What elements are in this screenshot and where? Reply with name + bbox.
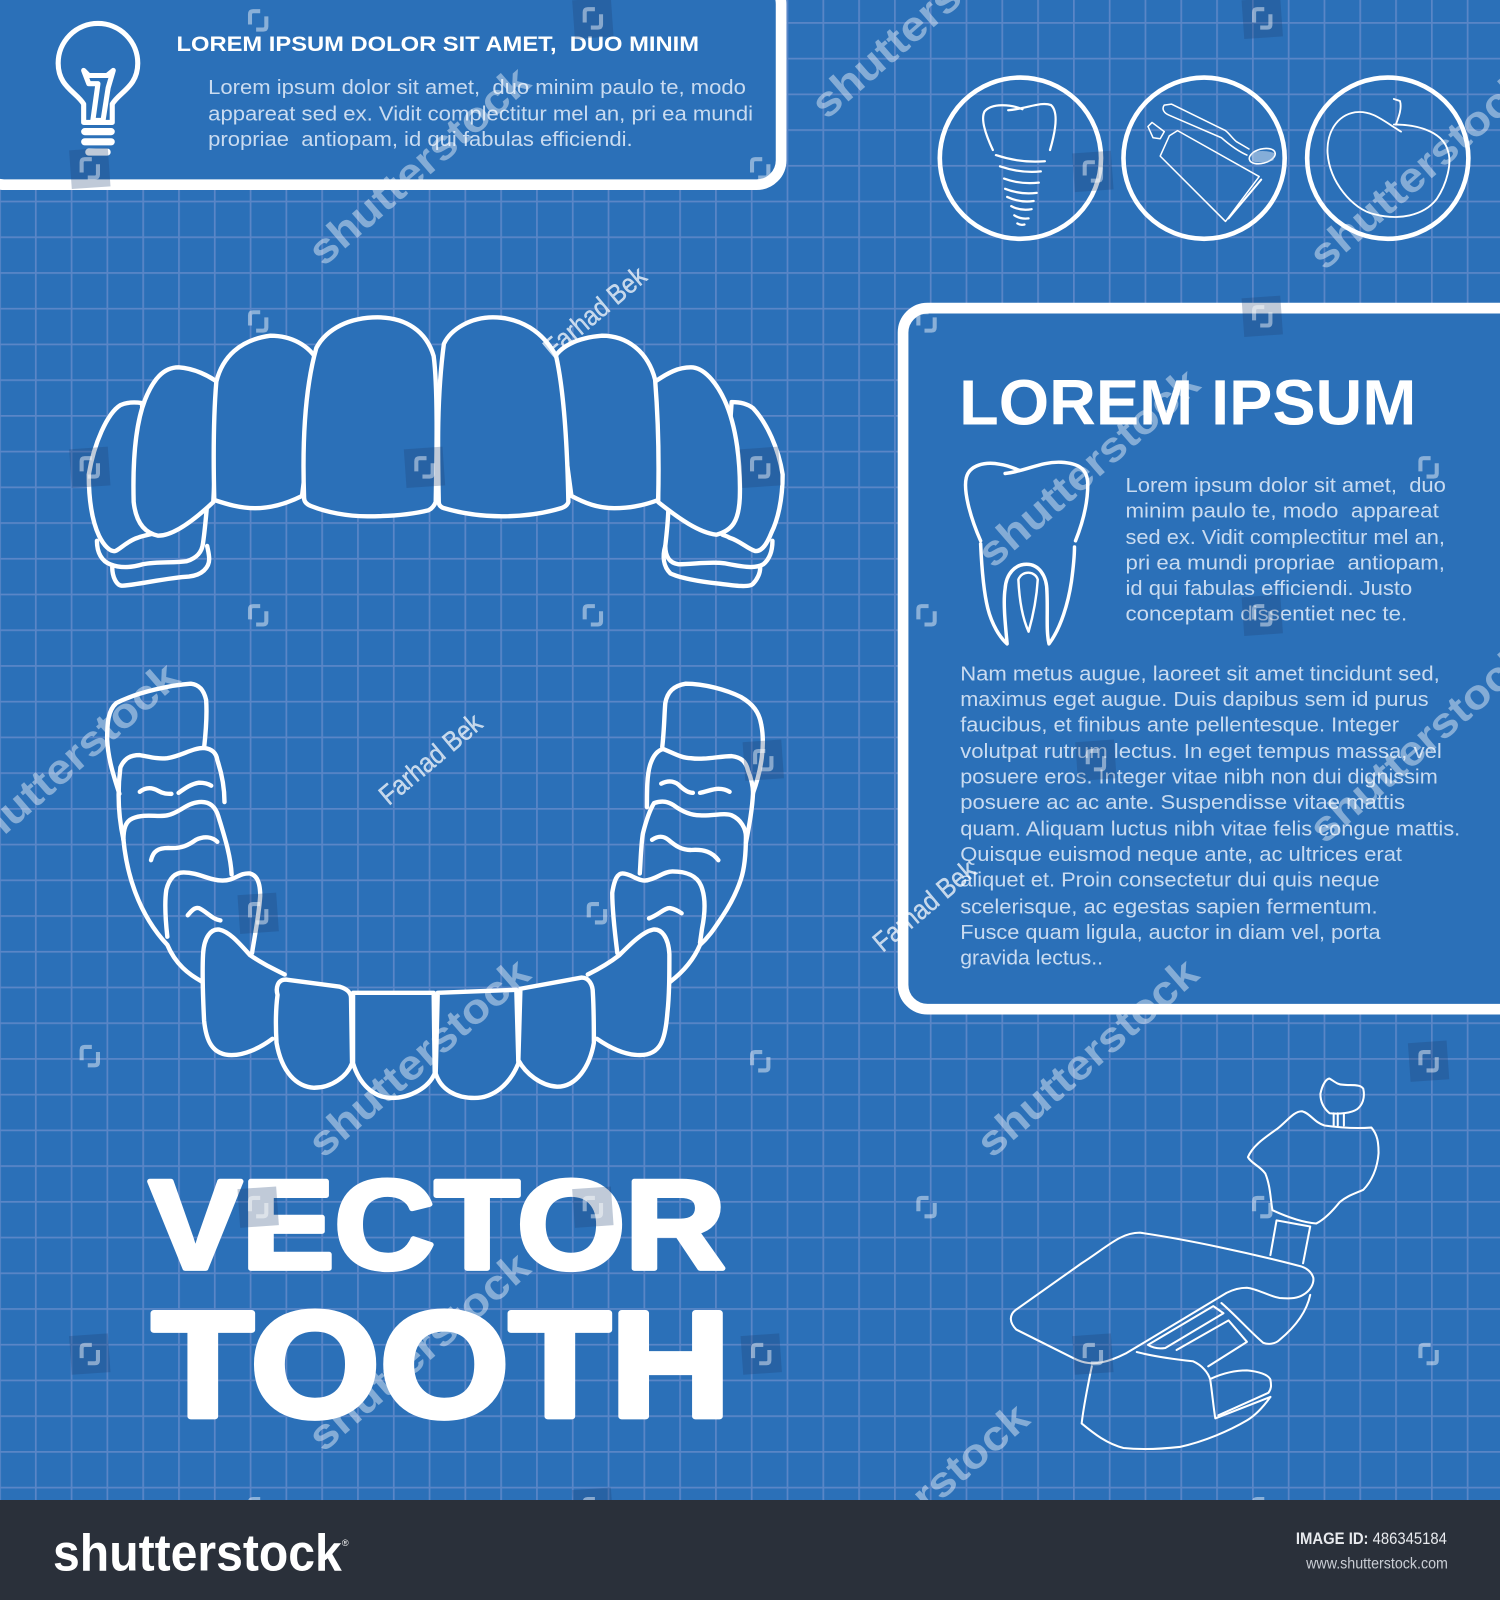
watermarks: shutterstock stock marks: shutterstock [968, 358, 1209, 576]
text block: right panel intro: id qui fabulas efficiendi. Justo [1126, 578, 1412, 600]
text block: right panel body: quam. Aliquam luctus nibh vitae felis congue mattis. [960, 819, 1460, 841]
watermarks: shutterstock stock marks: shutterstock [299, 948, 539, 1166]
title: VECTOR TOOTH [149, 1153, 731, 1448]
text block: top panel body: Lorem ipsum dolor sit amet, duo minim paulo te, modo [208, 77, 746, 99]
heading: top panel: LOREM IPSUM DOLOR SIT AMET, DUO MINIM [177, 32, 699, 56]
text block: top panel body: propriae antiopam, id qui fabulas efficiendi. [208, 129, 633, 151]
footer registered mark: ® [342, 1538, 349, 1548]
text block: right panel body: Nam metus augue, laoreet sit amet tincidunt sed, [960, 664, 1440, 686]
text block: right panel body: posuere ac ac ante. Suspendisse vitae mattis [960, 792, 1405, 814]
illustration: dental chair [1011, 1079, 1379, 1449]
icon: light bulb [58, 23, 138, 152]
title: VECTOR TOOTH: TOOTH [152, 1280, 731, 1448]
icon: tooth with root [966, 462, 1088, 644]
text block: right panel body: Quisque euismod neque ante, ac ultrices erat [960, 844, 1402, 866]
text block: right panel body: posuere eros. Integer vitae nibh non dui dignissim [960, 767, 1438, 789]
panel: top-left info box [0, 0, 781, 185]
text block: right panel body: scelerisque, ac egestas sapien fermentum. [960, 896, 1378, 918]
text block: top panel body [208, 77, 753, 151]
watermarks: shutterstock stock marks: Farhad Bek [537, 260, 652, 364]
watermarks: shutterstock stock marks: Farhad Bek [867, 854, 982, 958]
watermarks: shutterstock stock marks: shutterstock [299, 1242, 539, 1460]
text block: right panel intro: sed ex. Vidit complectitur mel an, [1126, 527, 1445, 549]
watermarks: shutterstock stock marks: shutterstock [967, 948, 1208, 1166]
footer url: www.shutterstock.com [1305, 1555, 1448, 1572]
illustration: lower teeth [107, 684, 763, 1098]
text block: right panel intro: pri ea mundi propriae antiopam, [1126, 552, 1445, 574]
text block: right panel body: aliquet et. Proin consectetur dui quis neque [960, 870, 1380, 892]
panel: right info box [903, 308, 1500, 1009]
icon: apple in circle [1307, 78, 1468, 239]
text block: top panel body: appareat sed ex. Vidit complectitur mel an, pri ea mundi [208, 103, 753, 125]
text block: right panel body: gravida lectus.. [960, 947, 1103, 969]
watermarks: shutterstock stock marks: shutterstock [299, 56, 539, 274]
text block: right panel intro [1126, 475, 1446, 625]
text block: right panel body: volutpat rutrum lectus. In eget tempus massa, vel [960, 741, 1442, 763]
icon: dental implant in circle [940, 78, 1101, 239]
text block: right panel intro: conceptam dissentiet nec te. [1126, 603, 1407, 625]
text block: right panel body: maximus eget augue. Duis dapibus sem id purus [960, 689, 1429, 711]
text block: right panel intro: minim paulo te, modo appareat [1126, 500, 1439, 522]
footer logo: shutterstock [53, 1524, 342, 1582]
icon: toothpaste and toothbrush in circle [1123, 78, 1285, 239]
text block: right panel body [960, 664, 1460, 969]
text block: right panel intro: Lorem ipsum dolor sit amet, duo [1126, 475, 1446, 497]
footer image id: IMAGE ID: 486345184 [1296, 1530, 1447, 1548]
watermarks: shutterstock stock marks: Farhad Bek [373, 707, 488, 811]
text block: right panel body: faucibus, et finibus ante pellentesque. Integer [960, 715, 1399, 737]
footer bar [0, 1500, 1500, 1600]
illustration: upper teeth [89, 317, 783, 586]
text block: right panel body: Fusce quam ligula, auctor in diam vel, porta [960, 922, 1381, 944]
title: VECTOR TOOTH: VECTOR [149, 1153, 726, 1295]
heading: right panel: LOREM IPSUM [959, 366, 1416, 438]
